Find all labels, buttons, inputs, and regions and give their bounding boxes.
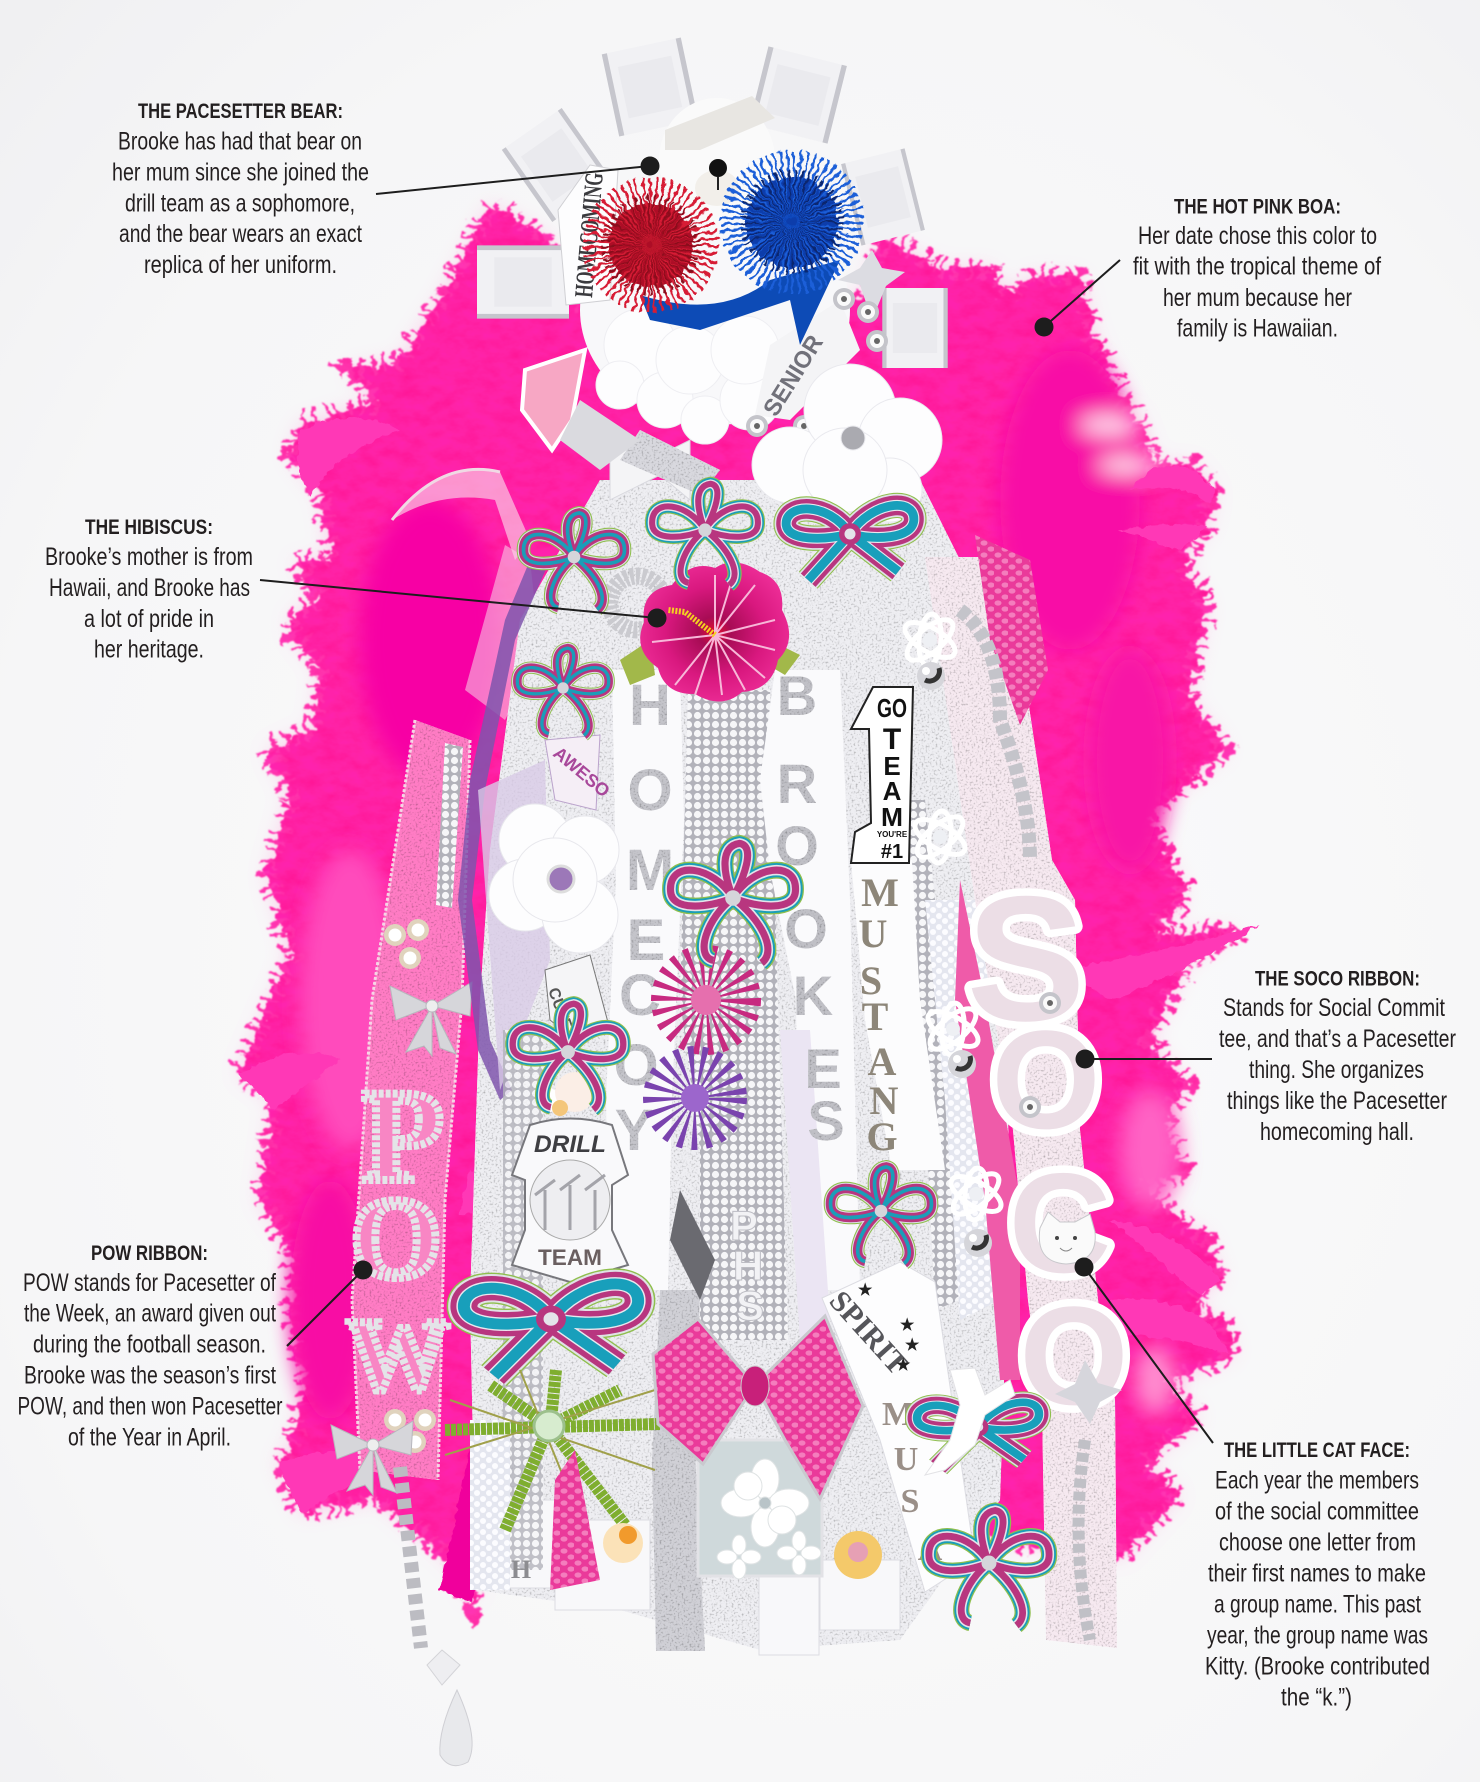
text: the SOCO ribbon: THE SOCO RIBBON: [1255, 966, 1420, 990]
number one go team badge: E [883, 751, 901, 781]
BROOKE letter ribbon: S [807, 1089, 845, 1152]
rhinestone jewels [746, 288, 888, 437]
homecoming letter ribbon: H [629, 673, 671, 738]
text: the little cat face [1205, 1438, 1430, 1712]
SOCO ribbon [925, 535, 1128, 1648]
BROOKE letter ribbon: E [804, 1037, 842, 1100]
text: POW ribbon: Brooke was the season’s first [24, 1362, 276, 1390]
leader: hibiscus [260, 580, 666, 628]
lower left hex ribbon [470, 1420, 510, 1590]
drill team badge: DRILL [534, 1131, 606, 1158]
MUSTANG ribbon: A [868, 1039, 897, 1084]
text: the little cat face: THE LITTLE CAT FACE: [1224, 1438, 1410, 1462]
text: the pacesetter bear: her mum since she joined the [112, 158, 369, 186]
spirit ribbon [822, 1262, 975, 1592]
hibiscus [620, 562, 800, 702]
text: the pacesetter bear: and the bear wears an exact [119, 220, 362, 248]
MUSTANG ribbon [851, 860, 945, 1170]
central streamers [458, 480, 1010, 1655]
text: the hot pink boa: THE HOT PINK BOA: [1174, 194, 1341, 218]
MUSTANG ribbon: T [862, 994, 889, 1039]
SOCO glitter letters: C [1009, 1144, 1111, 1303]
hot pink boa [239, 205, 1260, 1603]
senior text: SENIOR [758, 331, 829, 421]
silver star [838, 250, 905, 320]
MUSTANG ribbon: S [860, 958, 882, 1003]
spirit ribbon: A [918, 1531, 943, 1568]
SOCO glitter letters: O [1020, 1277, 1128, 1434]
purple organza ribbon [458, 560, 550, 1100]
blue pompom [746, 176, 838, 268]
spirit ribbon: M [882, 1396, 914, 1433]
text: the hibiscus: Hawaii, and Brooke has [49, 574, 250, 602]
number one go team badge: YOU'RE [877, 830, 908, 839]
white horse charm [925, 1368, 1015, 1475]
center rhinestone strip [680, 690, 788, 1340]
PHS letters: P [730, 1202, 758, 1249]
drill team badge [512, 1118, 628, 1282]
blue bandana [640, 260, 840, 345]
mum photograph [239, 38, 1260, 1766]
leader: POW ribbon [287, 1260, 372, 1346]
text: the little cat face: Each year the members [1215, 1466, 1419, 1494]
bottom streamer ends [480, 1500, 900, 1655]
text: the pacesetter bear: drill team as a sophomore, [125, 189, 355, 217]
spirit ribbon: ★ [900, 1317, 915, 1334]
homecoming letter ribbon: C [619, 963, 661, 1028]
text: the hibiscus: Brooke’s mother is from [45, 543, 253, 571]
spirit ribbon: SPIRIT [823, 1285, 914, 1381]
orange flower [603, 1523, 643, 1563]
MUSTANG ribbon: N [870, 1078, 899, 1123]
cute tag: CUTE [544, 986, 575, 1033]
text: POW ribbon: POW RIBBON: [91, 1241, 208, 1265]
BROOKE letter ribbon: O [775, 814, 819, 877]
leader: hot pink boa [1034, 260, 1120, 336]
white base [470, 480, 1010, 1650]
BROOKE letter ribbon: K [793, 964, 833, 1027]
yellow flower [834, 1531, 882, 1579]
white peony [489, 804, 619, 953]
white bow and silver ornaments [560, 400, 720, 500]
rhinestone strip right [900, 800, 960, 1310]
text: the little cat face: their first names to make [1208, 1560, 1426, 1588]
BROOKE letter ribbon: B [777, 664, 817, 727]
text: POW ribbon: the Week, an award given out [24, 1300, 276, 1328]
pearl brooches and silver bows [331, 919, 472, 1495]
MUSTANG ribbon: G [866, 1114, 898, 1159]
silver ring [610, 576, 664, 630]
PHS letters: S [736, 1282, 764, 1329]
number one go team badge: A [883, 776, 902, 806]
text: the SOCO ribbon [1219, 966, 1456, 1146]
spirit ribbon: S [901, 1483, 919, 1520]
text: POW ribbon: of the Year in April. [68, 1423, 231, 1451]
hex ribbon right [925, 900, 1000, 1320]
text: the little cat face: of the social committee [1215, 1498, 1419, 1526]
MUSTANG ribbon: M [861, 870, 899, 915]
text: POW ribbon [18, 1241, 282, 1451]
feather tufts [290, 350, 1180, 1420]
drill team badge: TEAM [538, 1245, 602, 1270]
silver box [698, 1440, 822, 1579]
side rhinestone strip [503, 1030, 543, 1570]
SOCO glitter letters [967, 859, 1128, 1434]
text: the hot pink boa: fit with the tropical theme of [1133, 253, 1381, 281]
text: the hot pink boa: Her date chose this color to [1138, 222, 1377, 250]
SOCO glitter letters: O [992, 1001, 1100, 1158]
purple starburst [667, 1070, 723, 1126]
text: the little cat face: Kitty. (Brooke contributed [1205, 1652, 1430, 1680]
cute tag [544, 955, 610, 1040]
spirit ribbon: U [894, 1441, 918, 1478]
loose feathers [239, 418, 1260, 1603]
text: POW ribbon: during the football season. [33, 1331, 266, 1359]
text: the hibiscus: THE HIBISCUS: [85, 515, 213, 539]
large white flower [752, 364, 942, 522]
PHS letters: H [733, 1242, 763, 1289]
text: the SOCO ribbon: homecoming hall. [1260, 1118, 1414, 1146]
number one go team badge: M [881, 802, 903, 832]
number one go team badge: T [883, 723, 901, 756]
text: the pacesetter bear [112, 99, 369, 279]
SOCO glitter letters: S [967, 859, 1085, 1058]
number one go team badge: GO [877, 693, 907, 723]
leader: little cat face [1074, 1258, 1213, 1443]
white fluff flower and teddy paws [596, 300, 860, 444]
text: the pacesetter bear: replica of her uniform. [144, 251, 337, 279]
text: the pacesetter bear: THE PACESETTER BEAR: [138, 99, 343, 123]
cat face [1039, 1212, 1095, 1264]
number one go team badge: #1 [881, 841, 903, 863]
spirit ribbon: ★ [896, 1357, 911, 1374]
rhinestone strip [436, 743, 463, 908]
star ornament [1055, 1360, 1122, 1424]
text: the hibiscus: a lot of pride in [84, 605, 214, 633]
BROOKE letter ribbon: R [777, 752, 817, 815]
PHS letters [730, 1202, 764, 1329]
spirit ribbon: ★ [858, 1282, 873, 1299]
text: the little cat face: choose one letter from [1219, 1528, 1416, 1556]
sheer pink ribbon loop [392, 468, 540, 720]
POW ribbon [331, 720, 472, 1495]
homecoming shield: HOMECOMING [569, 171, 609, 299]
text: the hibiscus: her heritage. [94, 636, 204, 664]
homecoming letter ribbon [606, 670, 684, 1290]
small plumeria flower [536, 1072, 595, 1116]
silver braid [960, 610, 1030, 860]
homecoming shield [558, 165, 618, 305]
text: POW ribbon: POW stands for Pacesetter of [23, 1269, 276, 1297]
pink butterfly tag [522, 350, 585, 450]
pink sheer ribbon [975, 535, 1048, 725]
MUSTANG ribbon: U [859, 911, 887, 956]
BROOKE letter ribbon [760, 664, 860, 1340]
POW rhinestone letters: P [363, 1062, 443, 1209]
magenta starburst [676, 970, 736, 1030]
awesome badge: AWESO [549, 743, 614, 801]
red pompom [609, 203, 693, 287]
senior sash [755, 300, 860, 420]
text: the little cat face: the “k.”) [1281, 1684, 1352, 1712]
ribbon bows [464, 484, 1049, 1625]
white backing behind bear [580, 195, 850, 425]
text: the SOCO ribbon: thing. She organizes [1249, 1056, 1424, 1084]
top ribbon loops [477, 38, 946, 368]
organza bows and bells [900, 613, 1006, 1257]
text: the hot pink boa: family is Hawaiian. [1177, 315, 1338, 343]
rhinestone chain and crystal drop [400, 1467, 472, 1766]
text: POW ribbon: POW, and then won Pacesetter [18, 1392, 282, 1420]
white flowers [717, 1459, 821, 1579]
pacesetter bear [659, 96, 775, 222]
large pink bow [653, 1316, 863, 1499]
BROOKE letter ribbon: O [784, 897, 828, 960]
text: the pacesetter bear: Brooke has had that bear on [118, 128, 362, 156]
POW rhinestone letters: W [347, 1299, 449, 1412]
leader: SOCO ribbon [1076, 1050, 1212, 1068]
silver hammered strip [652, 1290, 705, 1651]
horse charm dark ornament [670, 1190, 715, 1300]
homecoming letter ribbon: M [626, 838, 674, 903]
text: the hot pink boa: her mum because her [1163, 284, 1352, 312]
homecoming letter ribbon: O [627, 758, 673, 823]
text: the little cat face: a group name. This past [1214, 1590, 1421, 1618]
POW rhinestone letters: O [351, 1175, 441, 1303]
POW rhinestone letters [347, 1062, 449, 1412]
H letter: H [511, 1555, 531, 1584]
text: the hibiscus [45, 515, 253, 664]
leader: pacesetter bear [376, 156, 660, 194]
number one go team badge [851, 687, 913, 863]
homecoming letter ribbon: O [613, 1033, 659, 1098]
homecoming letter ribbon: E [627, 908, 665, 973]
green sunburst [445, 1370, 660, 1590]
spirit ribbon: ★ [905, 1337, 920, 1354]
homecoming letter ribbon: Y [615, 1098, 653, 1163]
text: the hot pink boa [1133, 194, 1381, 343]
